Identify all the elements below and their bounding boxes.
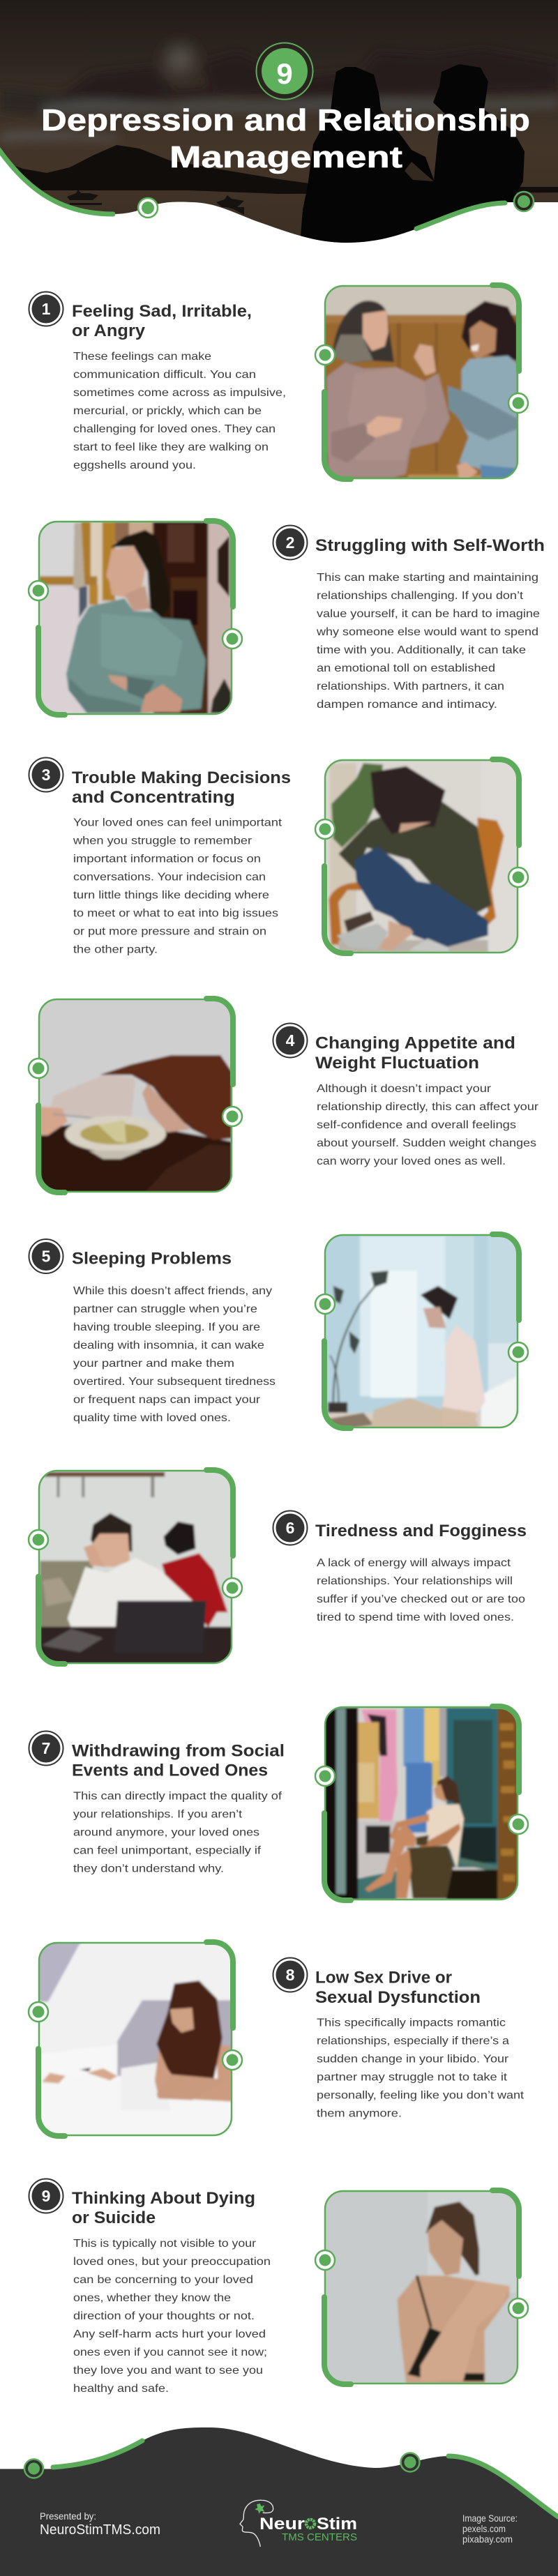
body text: turn little things like deciding where xyxy=(73,890,269,901)
body text xyxy=(73,351,286,471)
body text: Any self-harm acts hurt your loved xyxy=(73,2328,266,2340)
body text: loved ones, but your preoccupation xyxy=(73,2256,271,2268)
photo frame: woman by window xyxy=(29,516,242,725)
banner marker right xyxy=(514,192,534,211)
body text xyxy=(73,1791,282,1874)
body text: or put more pressure and strain on xyxy=(73,926,266,937)
body text: start to feel like they are walking on xyxy=(73,441,269,453)
body text xyxy=(316,572,540,711)
panel: item 5 xyxy=(29,1232,528,1431)
heading: Feeling Sad, Irritable, xyxy=(72,302,252,321)
body text: can be concerning to your loved xyxy=(73,2274,253,2286)
presented by: NeuroStimTMS.com xyxy=(40,2522,160,2538)
curve accents xyxy=(0,149,113,214)
marker right xyxy=(223,629,242,649)
body text xyxy=(73,2238,271,2395)
body text: around anymore, your loved ones xyxy=(73,1827,259,1838)
heading xyxy=(72,1742,285,1780)
heading: Low Sex Drive or xyxy=(315,1968,452,1987)
number badge 6: 6 xyxy=(286,1519,294,1537)
couple silhouette xyxy=(300,64,530,245)
heading: and Concentrating xyxy=(72,788,235,807)
distant mountain xyxy=(0,145,558,194)
number badge 7: 7 xyxy=(42,1739,50,1757)
body text: relationships. Your relationships will xyxy=(317,1575,513,1587)
number badge 9 xyxy=(257,43,312,99)
body text: when you struggle to remember xyxy=(73,835,252,847)
marker right xyxy=(508,867,528,887)
presented by: Presented by: xyxy=(40,2510,96,2522)
number badge 2 xyxy=(273,526,307,559)
panel: item 3 xyxy=(29,757,528,957)
body text: sometimes come across as impulsive, xyxy=(73,387,286,399)
marker left xyxy=(29,1530,48,1550)
boats xyxy=(67,190,244,215)
panel: item 9 xyxy=(29,2179,528,2395)
photo frame: woman holding her forehead xyxy=(315,2187,528,2388)
logo wordmark: Neur xyxy=(259,2515,305,2533)
body text: ones, whether they know the xyxy=(73,2292,231,2304)
body text: A lack of energy will always impact xyxy=(317,1557,511,1569)
number badge 3: 3 xyxy=(42,766,50,784)
body text: time with you. Additionally, it can take xyxy=(317,644,526,656)
body text: conversations. Your indecision can xyxy=(73,872,266,883)
heading xyxy=(72,302,252,340)
body text: Your loved ones can feel unimportant xyxy=(73,817,282,828)
footer wave background xyxy=(0,2427,558,2576)
body text: can feel unimportant, especially if xyxy=(73,1845,262,1856)
body text: communication difficult. You can xyxy=(73,369,256,381)
body text: suffer if you’ve checked out or are too xyxy=(317,1593,525,1605)
image source: Image Source: xyxy=(462,2513,518,2524)
body text: direction of your thoughts or not. xyxy=(73,2310,255,2322)
body text: the other party. xyxy=(73,944,158,955)
body text: This can directly impact the quality of xyxy=(73,1791,282,1802)
body text xyxy=(73,817,282,955)
marker left xyxy=(29,2002,48,2022)
number badge 4 xyxy=(273,1024,307,1057)
panel: item 2 xyxy=(29,516,545,725)
body text: ones even if you cannot see it now; xyxy=(73,2347,267,2358)
number badge 1 xyxy=(29,291,63,326)
body text: your relationships. If you aren’t xyxy=(73,1809,243,1820)
panel: item 1 xyxy=(29,279,528,490)
panel: item 4 xyxy=(29,997,539,1196)
body text xyxy=(317,1557,525,1623)
body text xyxy=(73,1285,276,1424)
marker left xyxy=(29,581,48,600)
footer marker left xyxy=(24,2459,43,2478)
banner photo: couple silhouette at dusk xyxy=(0,0,558,245)
curve accents xyxy=(53,2441,558,2517)
heading: Withdrawing from Social xyxy=(72,1742,285,1760)
body text: mercurial, or prickly, which can be xyxy=(73,405,262,417)
image source: pixabay.com xyxy=(462,2533,513,2545)
banner marker left xyxy=(138,198,158,218)
heading: Struggling with Self-Worth xyxy=(315,536,545,555)
logo subtitle: TMS CENTERS xyxy=(282,2531,357,2543)
body text: quality time with loved ones. xyxy=(73,1412,231,1424)
number badge 5 xyxy=(29,1239,63,1273)
body text: relationships. With partners, it can xyxy=(317,681,504,692)
number badge 7 xyxy=(29,1731,63,1766)
heading: Tiredness and Fogginess xyxy=(315,1522,527,1540)
footer xyxy=(0,2427,558,2576)
image source: pexels.com xyxy=(462,2523,506,2534)
heading: Sleeping Problems xyxy=(72,1250,232,1268)
number badge 2: 2 xyxy=(286,533,294,552)
marker right xyxy=(223,2050,242,2070)
body text: your partner and make them xyxy=(73,1358,234,1370)
image source xyxy=(462,2513,518,2545)
title: Depression and Relationship xyxy=(41,103,530,137)
heading: Events and Loved Ones xyxy=(72,1761,268,1780)
body text: Although it doesn’t impact your xyxy=(317,1083,492,1095)
logo wordmark end: Stim xyxy=(317,2515,357,2533)
body text: why someone else would want to spend xyxy=(316,626,538,638)
body text: This is typically not visible to your xyxy=(73,2238,257,2250)
logo starburst o xyxy=(306,2520,315,2528)
number badge 9: 9 xyxy=(42,2187,50,2205)
presented by xyxy=(40,2510,160,2538)
body text: them anymore. xyxy=(317,2107,402,2120)
number badge 5: 5 xyxy=(42,1247,51,1265)
heading: Trouble Making Decisions xyxy=(72,768,291,787)
body text: important information or focus on xyxy=(73,854,261,865)
header banner xyxy=(0,0,558,245)
body text: eggshells around you. xyxy=(73,460,196,471)
marker left xyxy=(315,819,335,839)
marker left xyxy=(29,1059,48,1078)
body text: about yourself. Sudden weight changes xyxy=(317,1137,536,1149)
body text: relationships, especially if there’s a xyxy=(317,2035,509,2047)
body text: While this doesn’t affect friends, any xyxy=(73,1285,272,1297)
body text: healthy and safe. xyxy=(73,2383,169,2395)
body text: self-confidence and overall feelings xyxy=(317,1119,516,1131)
photo frame: two women arguing xyxy=(315,279,528,490)
body text: can worry your loved ones as well. xyxy=(317,1156,506,1167)
heading xyxy=(72,768,291,807)
body text: This specifically impacts romantic xyxy=(317,2017,506,2029)
number badge 8: 8 xyxy=(286,1966,295,1984)
heading xyxy=(315,1968,481,2007)
marker left xyxy=(315,1294,335,1314)
body text: personally, feeling like you don’t want xyxy=(317,2089,525,2102)
logo head outline xyxy=(240,2500,273,2547)
photo frame: woman asleep over soup bowl xyxy=(29,997,242,1196)
number badge 1: 1 xyxy=(42,300,51,318)
number badge 6 xyxy=(273,1510,307,1545)
body text: These feelings can make xyxy=(73,351,211,363)
marker left xyxy=(315,345,335,365)
marker left xyxy=(315,1766,335,1786)
body text: sudden change in your libido. Your xyxy=(317,2053,509,2066)
heading: or Suicide xyxy=(72,2208,156,2227)
photo frame: tired mother with laptop and child xyxy=(29,1467,242,1667)
body text: partner may struggle not to take it xyxy=(317,2071,508,2084)
photo frame: woman sitting on bed xyxy=(315,1232,528,1431)
panel: item 7 xyxy=(29,1700,528,1909)
number badge 8 xyxy=(273,1958,307,1992)
body text: overtired. Your subsequent tiredness xyxy=(73,1376,276,1388)
heading: or Angry xyxy=(72,321,146,340)
marker right xyxy=(508,1814,528,1834)
number badge 9: 9 xyxy=(276,57,293,90)
marker right xyxy=(508,393,528,413)
panel: item 8 xyxy=(29,1940,525,2139)
body text: challenging for loved ones. They can xyxy=(73,423,276,435)
body text: partner can struggle when you’re xyxy=(73,1303,257,1315)
photo frame: woman in white bed xyxy=(29,1940,242,2139)
body text: value yourself, it can be hard to imagine xyxy=(317,608,540,620)
heading: Sexual Dysfunction xyxy=(315,1988,481,2007)
body text: relationship directly, this can affect your xyxy=(317,1101,539,1113)
heading: Thinking About Dying xyxy=(72,2189,255,2208)
body text: having trouble sleeping. If you are xyxy=(73,1321,260,1333)
heading: Changing Appetite and xyxy=(315,1033,515,1053)
body text: to meet or what to eat into big issues xyxy=(73,908,278,919)
number badge 9 xyxy=(29,2179,63,2213)
logo: NeuroStim TMS Centers xyxy=(240,2500,357,2547)
number badge 3 xyxy=(29,757,63,792)
body text: tired to spend time with loved ones. xyxy=(317,1612,514,1623)
title xyxy=(41,103,530,174)
marker right xyxy=(223,1578,242,1598)
panel: item 6 xyxy=(29,1467,527,1667)
body text: or frequent naps can impact your xyxy=(73,1394,261,1406)
marker right xyxy=(508,1342,528,1362)
body text: relationships challenging. If you don’t xyxy=(317,590,524,602)
body text: they don’t understand why. xyxy=(73,1863,224,1874)
body text: they love you and want to see you xyxy=(73,2365,263,2377)
body text xyxy=(317,1083,539,1167)
body text: dealing with insomnia, it can wake xyxy=(73,1340,264,1351)
heading xyxy=(315,1033,515,1073)
body text: an emotional toll on established xyxy=(317,662,495,674)
body text: This can make starting and maintaining xyxy=(317,572,538,584)
number badge 4: 4 xyxy=(286,1031,295,1050)
marker left xyxy=(315,2250,335,2270)
photo frame: woman on window ledge with mural xyxy=(315,1700,528,1909)
body text xyxy=(317,2017,525,2120)
body text: dampen romance and intimacy. xyxy=(317,699,497,711)
marker right xyxy=(508,2298,528,2318)
marker right xyxy=(223,1107,242,1126)
footer marker right xyxy=(400,2453,420,2471)
title: Management xyxy=(169,140,402,174)
heading: Weight Fluctuation xyxy=(315,1054,479,1073)
photo frame: woman on chair head in hands xyxy=(315,757,528,957)
heading xyxy=(72,2189,255,2227)
